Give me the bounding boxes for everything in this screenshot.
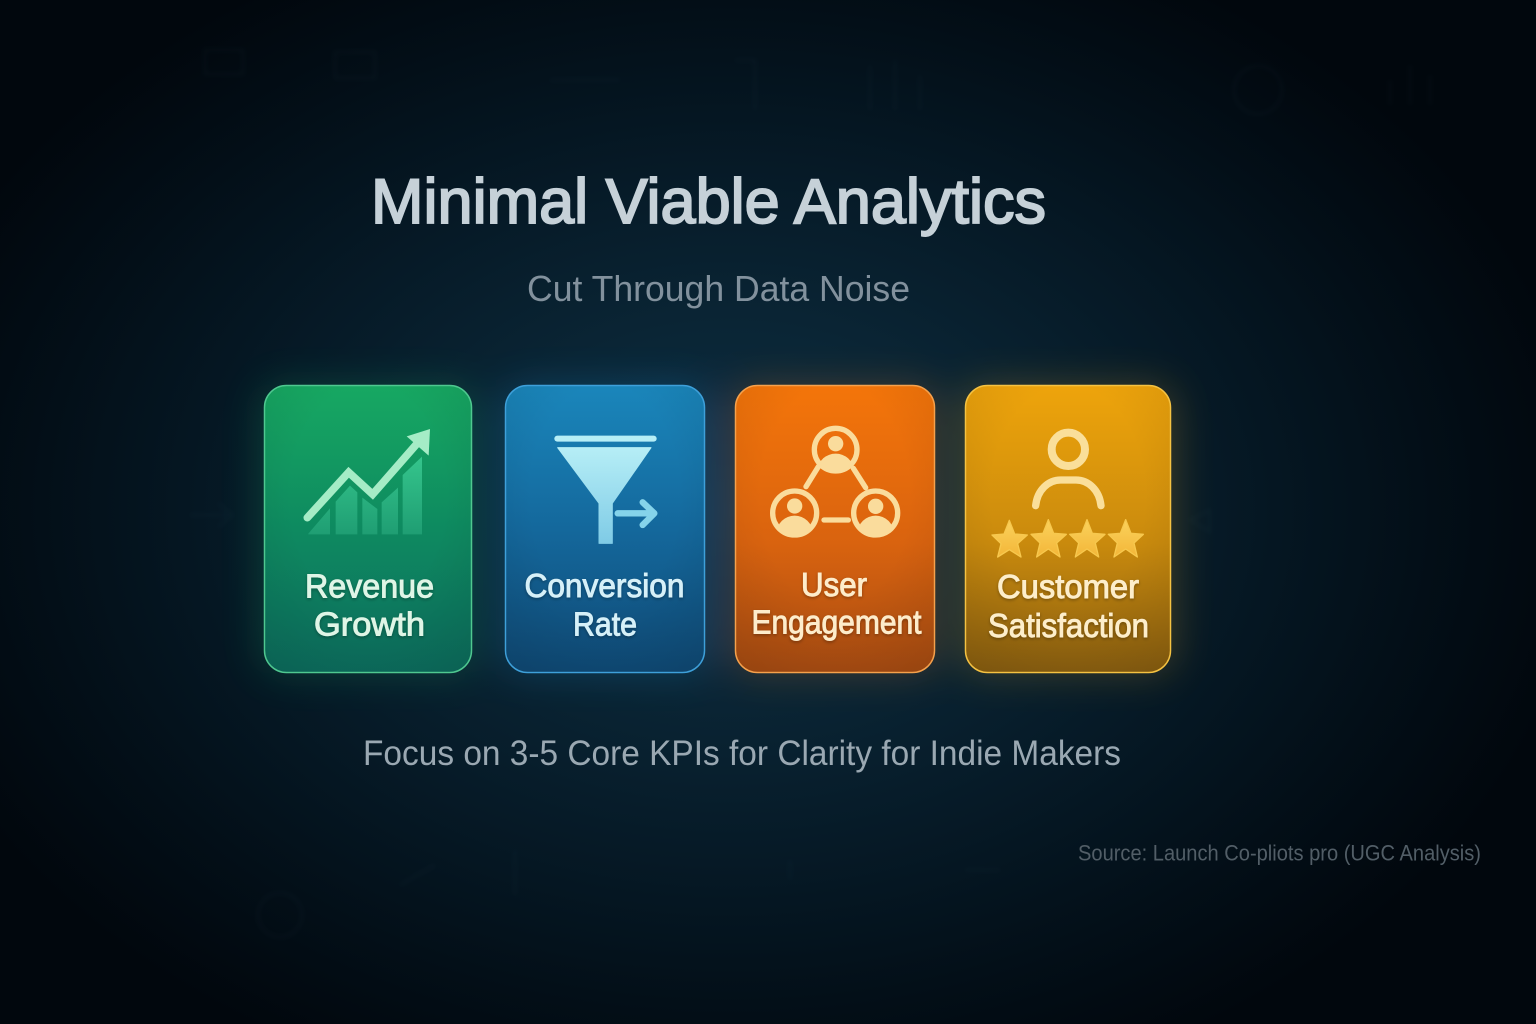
icon: rising chart with arrow [307, 429, 430, 534]
card glows [260, 385, 1175, 673]
icon: three connected users [773, 428, 898, 550]
subtitle: Cut Through Data Noise [527, 268, 910, 309]
panel: customer satisfaction [966, 386, 1170, 672]
label: Customer Satisfaction: Satisfaction [988, 607, 1149, 644]
label: Conversion Rate: Rate [573, 606, 637, 642]
panel: revenue growth [264, 386, 472, 672]
tagline: Focus on 3-5 Core KPIs for Clarity for Indie Makers [363, 734, 1121, 773]
card background [966, 386, 1170, 672]
card background [506, 386, 704, 672]
label: Conversion Rate: Conversion [524, 567, 684, 604]
panel: conversion rate [506, 386, 704, 672]
panel: user engagement [736, 386, 934, 672]
label: Customer Satisfaction [988, 568, 1149, 644]
label: Conversion Rate [524, 567, 684, 642]
source note: Source: Launch Co-pliots pro (UGC Analysis) [1078, 840, 1481, 866]
label: User Engagement: Engagement [752, 604, 922, 640]
label: Revenue Growth: Revenue [305, 568, 434, 604]
label: User Engagement: User [801, 566, 867, 603]
card background [736, 386, 934, 672]
title: Minimal Viable Analytics [371, 167, 1046, 237]
icon: customer with stars [992, 433, 1143, 557]
label: Customer Satisfaction: Customer [997, 568, 1139, 605]
label: User Engagement [752, 566, 922, 640]
label: Revenue Growth: Growth [314, 606, 425, 642]
faint background data icons [190, 50, 1430, 937]
card background [264, 386, 472, 672]
icon: funnel with arrow [554, 436, 657, 543]
label: Revenue Growth [305, 568, 434, 642]
